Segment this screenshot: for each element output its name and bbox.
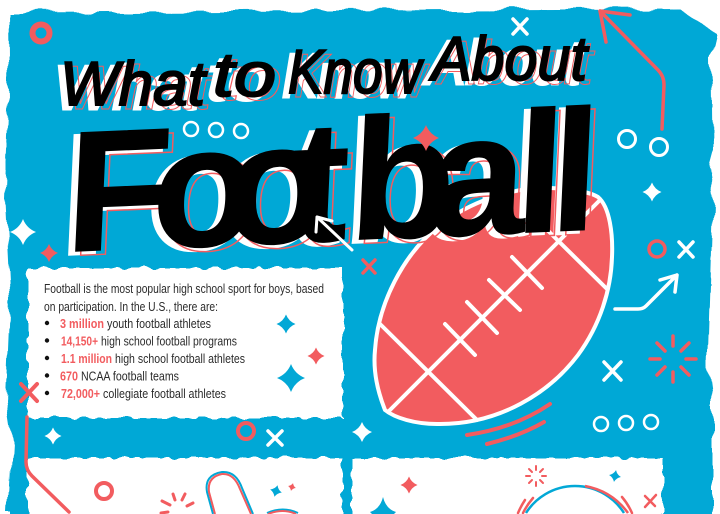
icon: white x right <box>679 242 693 257</box>
decorative icons: upper area <box>10 11 693 273</box>
icon: blue star <box>370 497 396 514</box>
statistics list: youth football athletes <box>107 316 211 331</box>
statistics list: 1.1 million <box>61 351 112 366</box>
blue background base <box>10 490 712 514</box>
title: What to Know About: About <box>428 25 590 94</box>
icon: white star left <box>10 219 36 245</box>
title: What to Know About: What <box>66 54 214 123</box>
icon: three white circles lower <box>594 415 658 431</box>
icon: blue small star <box>608 469 622 483</box>
icon: red ring right <box>649 241 665 257</box>
panel: bottom right card <box>352 458 663 514</box>
title: What to Know About: to <box>213 41 276 110</box>
arrow: red route line left <box>26 417 69 512</box>
title: What to Know About <box>54 25 596 123</box>
intro text: Football is the most popular high school sport for boys, based <box>44 281 324 296</box>
statistics list: 3 million <box>60 316 104 331</box>
icon: red star left <box>40 244 58 262</box>
icon: red small burst <box>526 466 546 486</box>
illustration: bottom left card <box>96 472 298 514</box>
title: Football: Football <box>56 76 598 292</box>
title: What to Know About: Know <box>282 42 419 111</box>
icon: red star centre <box>413 125 439 151</box>
intro text: on participation. In the U.S., there are: <box>44 299 218 314</box>
panel: statistics text box <box>28 268 343 418</box>
panel: bottom left card <box>28 458 342 514</box>
decorative icons: right of football <box>352 275 696 442</box>
icon: red ring lower <box>238 423 254 439</box>
decorative icons: stars in text box <box>276 314 324 392</box>
statistics list: 14,150+ <box>61 334 98 348</box>
icon: red ring <box>96 483 112 499</box>
arrow: red route arrow top right <box>600 11 664 129</box>
icon: foam finger blue outline <box>207 472 298 514</box>
icon: red star <box>287 482 297 492</box>
icon: ball circle red <box>585 486 628 513</box>
icon: ball circle blue <box>526 486 624 513</box>
title: What to Know About: to <box>219 45 282 114</box>
icon: white x lower <box>268 431 282 445</box>
motion lines under football <box>467 404 550 444</box>
statistics list <box>45 316 245 401</box>
statistics list: 72,000+ <box>61 386 100 401</box>
icon: red star <box>400 476 418 494</box>
title: Football: Football <box>62 73 604 289</box>
icon: red star small <box>308 348 324 364</box>
arrow: white arrow in title <box>316 217 352 250</box>
icon: red burst <box>161 494 193 513</box>
statistics list: high school football athletes <box>115 351 245 366</box>
arrow: white route arrow <box>615 275 677 309</box>
statistics list: high school football programs <box>101 334 237 348</box>
icon: red x centre <box>363 260 375 273</box>
statistics list: collegiate football athletes <box>103 386 226 401</box>
title: What to Know About: What <box>60 50 208 119</box>
icon: red ring top left <box>32 24 50 42</box>
title: What to Know About: to <box>207 45 270 114</box>
decorative icons: between panels <box>21 384 282 512</box>
icon: white star right <box>642 182 662 202</box>
statistics list: NCAA football teams <box>81 368 179 384</box>
title: What to Know About: Know <box>294 42 431 111</box>
icon: blue star large <box>277 364 305 392</box>
icon: three white circles <box>184 122 248 138</box>
icon: foam finger red outline <box>209 474 296 514</box>
title: Football: Football <box>67 77 609 293</box>
illustration: football <box>374 188 612 424</box>
intro text <box>44 281 324 314</box>
icon: white circles right <box>618 130 668 156</box>
icon: white star centre <box>352 422 372 442</box>
icon: blue star <box>269 484 283 498</box>
illustration: bottom right card <box>370 466 656 514</box>
icon: red x on box edge <box>21 384 37 401</box>
icon: white star lower left <box>44 428 62 444</box>
title: What to Know About: About <box>422 29 584 98</box>
title: What to Know About: About <box>434 29 596 98</box>
title: What to Know About: Know <box>288 38 425 107</box>
icon: white x <box>604 362 621 380</box>
icon: white x top <box>513 19 527 34</box>
icon: blue star small <box>276 314 296 334</box>
icon: red motion arcs <box>518 497 632 513</box>
icon: red small x <box>645 495 656 507</box>
title: What to Know About: What <box>54 54 202 123</box>
icon: red burst <box>650 336 696 382</box>
statistics list: 670 <box>60 368 78 384</box>
